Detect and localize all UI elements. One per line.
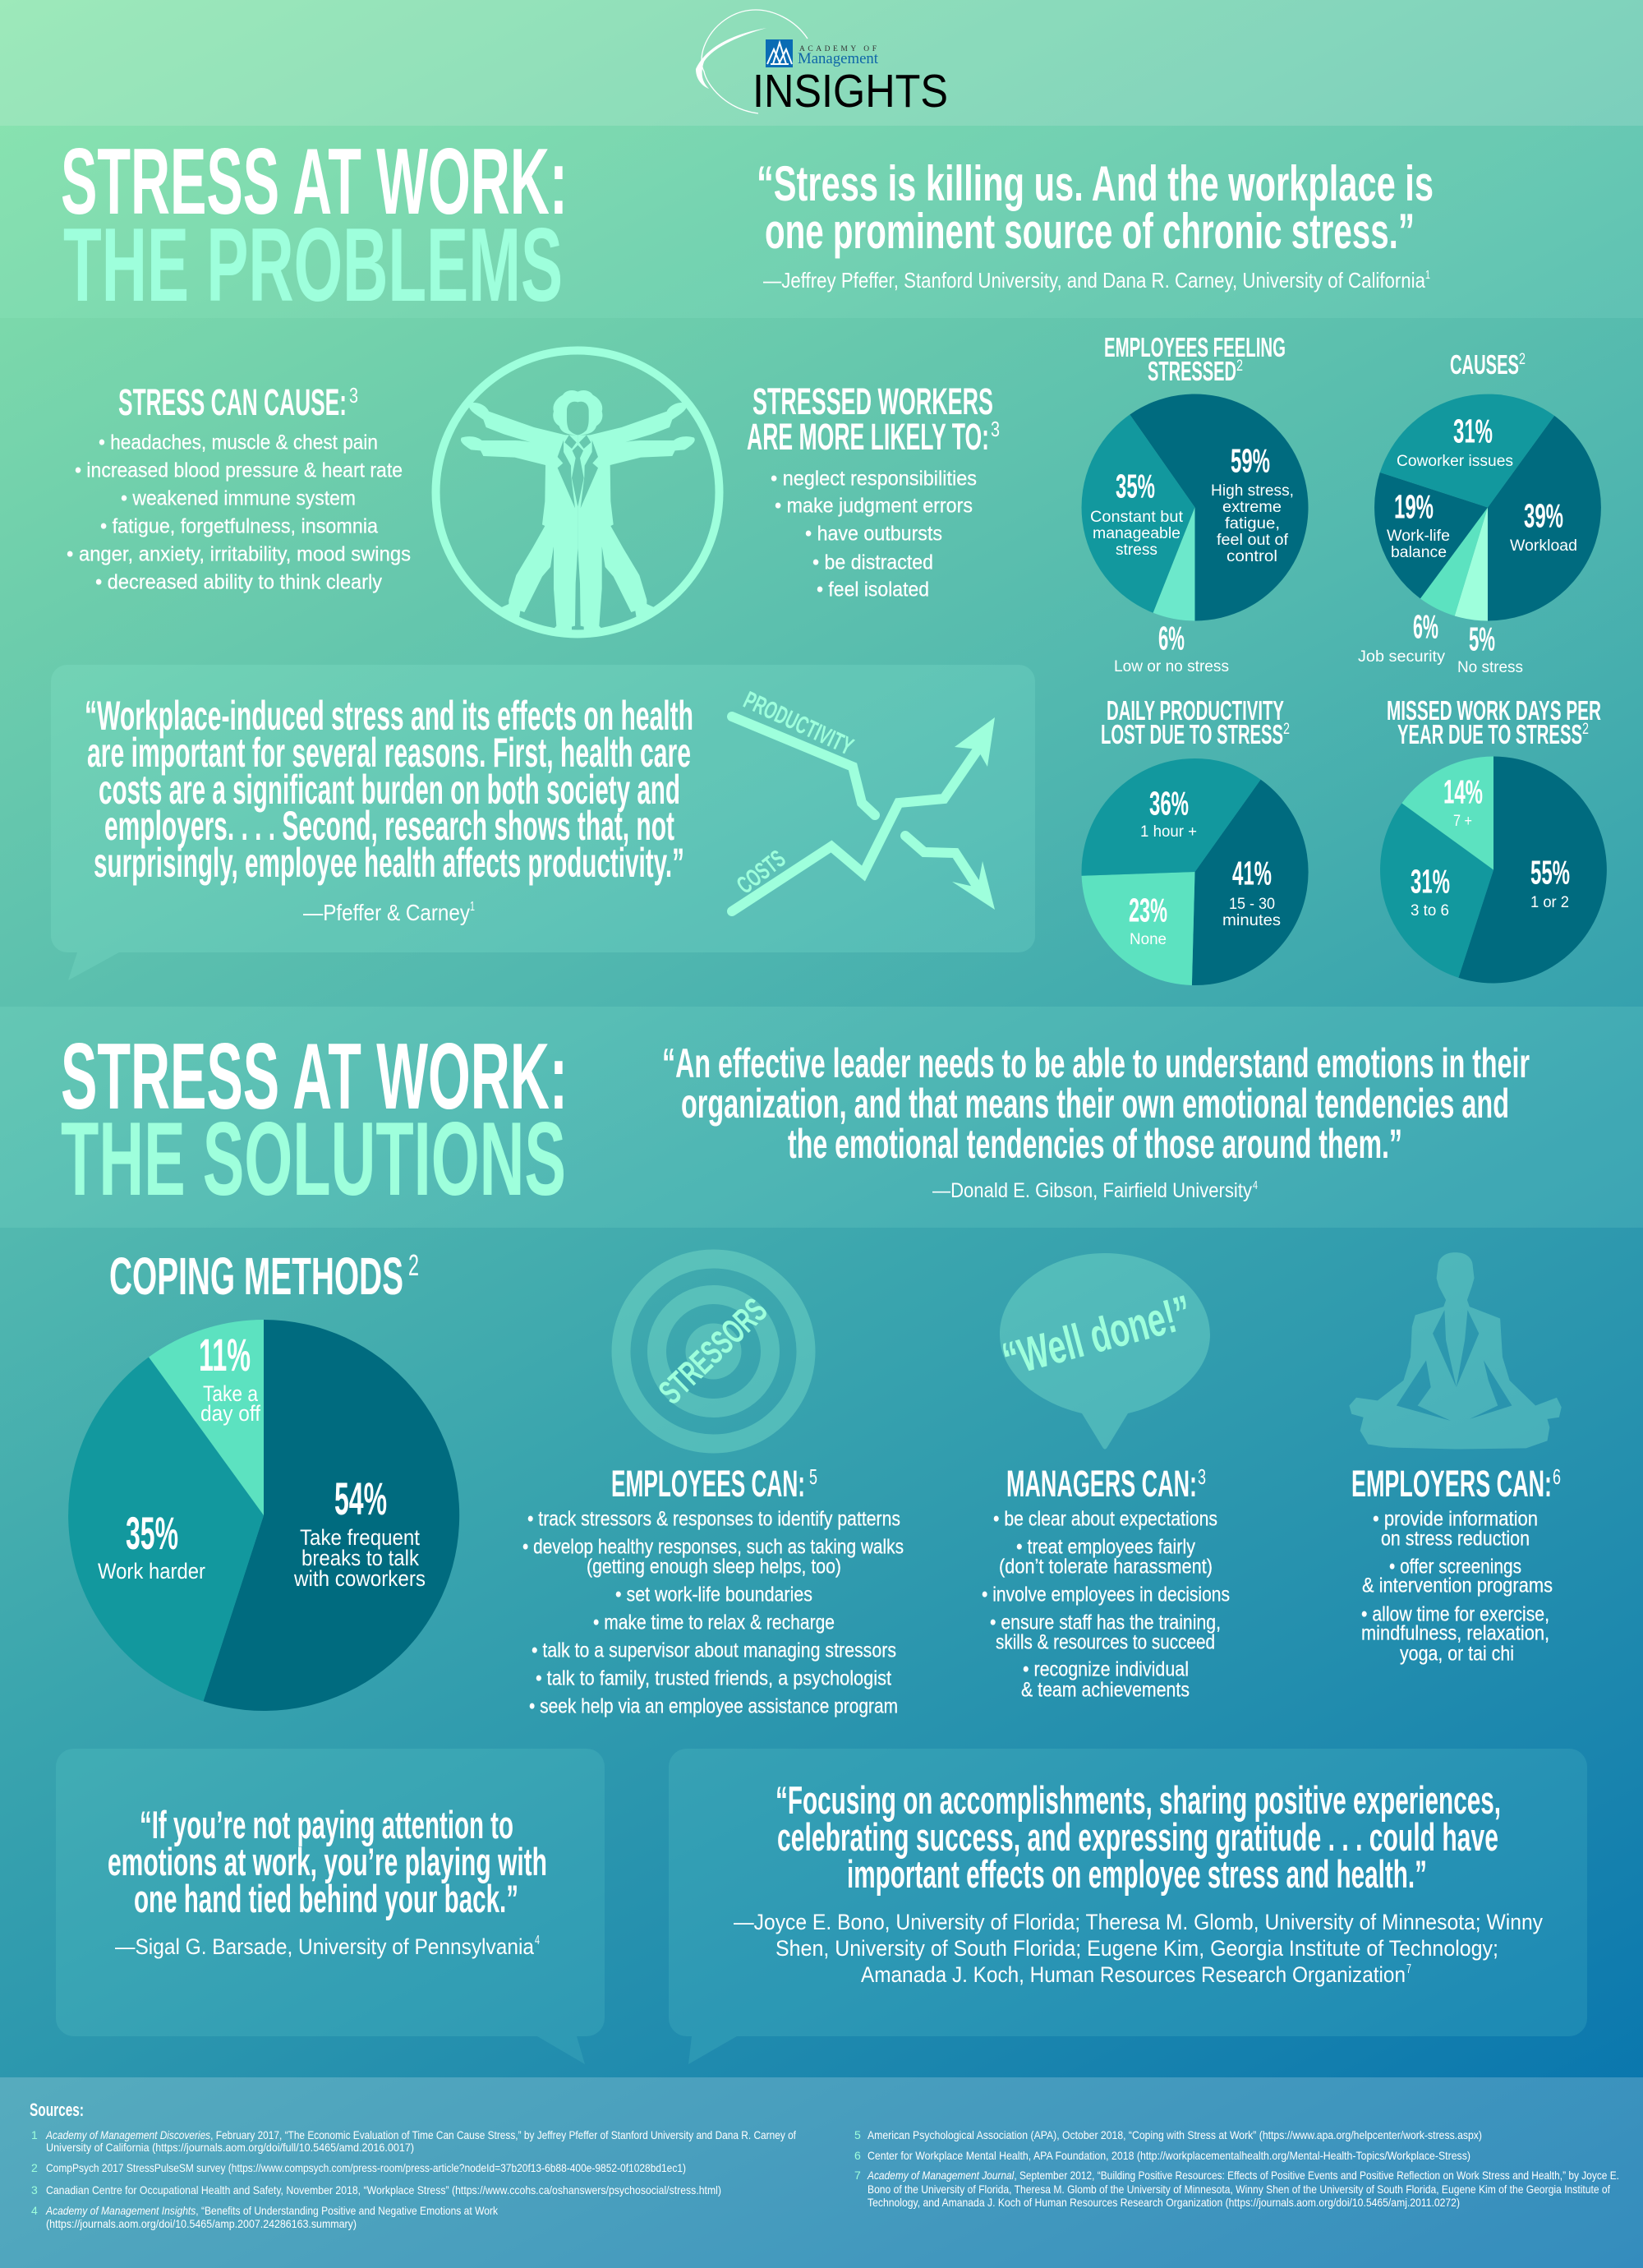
callout: Bono et al. quote: Amanada J. Koch, Human Resources Research Organization: [861, 1962, 1406, 1987]
panel: employees can: EMPLOYEES CAN:: [611, 1463, 805, 1505]
chart: missed work days: 1 or 2: [1530, 894, 1569, 911]
callout: Barsade quote: emotions at work, you’re playing with: [108, 1840, 547, 1883]
panel: stress can cause: 3: [349, 383, 358, 408]
panel: stressed workers: • neglect responsibilities: [771, 467, 977, 490]
panel: stress can cause: • weakened immune system: [121, 486, 356, 509]
sources list: CompPsych 2017 StressPulseSM survey (https://www.compsych.com/press-room/press-article?nodeId=37b20f13-6b88-400e-9852-0f1028bd1ec1): [46, 2161, 686, 2174]
panel: stressed workers: 3: [991, 417, 1000, 441]
panel: managers can: [982, 1463, 1230, 1701]
logo: [696, 10, 948, 118]
chart: causes: 31%: [1453, 413, 1493, 450]
chart: missed work days: 31%: [1411, 863, 1450, 901]
panel: employees can: 5: [809, 1464, 817, 1489]
callout: Barsade quote: one hand tied behind your back.”: [134, 1877, 518, 1920]
chart: causes: 19%: [1394, 488, 1434, 526]
sources list: 7: [854, 2169, 861, 2182]
quote: Pfeffer and Carney top: 1: [1425, 268, 1430, 282]
sources list: 4: [31, 2204, 38, 2217]
band: sources: [0, 2077, 1643, 2268]
chart: daily productivity lost: LOST DUE TO STRESS: [1101, 719, 1283, 749]
icon: well done speech bubble: [997, 1253, 1210, 1450]
chart: daily productivity lost: 41%: [1232, 855, 1272, 892]
callout: workplace induced stress: employers. . . . Second, research shows that, not: [104, 803, 674, 849]
callout: workplace induced stress: costs are a significant burden on both society and: [99, 767, 680, 813]
panel: managers can: MANAGERS CAN:: [1006, 1463, 1197, 1505]
panel: employees can: (getting enough sleep helps, too): [587, 1555, 841, 1578]
panel: employees can: • develop healthy responses, such as taking walks: [522, 1535, 904, 1558]
sources list: University of California (https://journals.aom.org/doi/full/10.5465/amd.2016.0017): [46, 2141, 414, 2154]
callout: Barsade quote: —Sigal G. Barsade, University of Pennsylvania: [115, 1934, 535, 1959]
panel: employees can: • track stressors & responses to identify patterns: [527, 1507, 900, 1530]
quote: Pfeffer and Carney top: —Jeffrey Pfeffer, Stanford University, and Dana R. Carney, University of California: [763, 268, 1425, 293]
panel: stressed workers: • make judgment errors: [775, 495, 973, 518]
chart: causes: No stress: [1457, 659, 1523, 676]
panel: stress can cause: [67, 381, 411, 593]
panel: employees can: • talk to family, trusted friends, a psychologist: [536, 1666, 891, 1689]
chart: employees feeling stressed: 59%: [1231, 442, 1270, 480]
panel: stress can cause: • anger, anxiety, irritability, mood swings: [67, 542, 411, 565]
callout: workplace induced stress: 1: [470, 900, 475, 914]
callout: Bono et al. quote: Shen, University of South Florida; Eugene Kim, Georgia Institute of Technology;: [775, 1936, 1498, 1961]
icon: stressors target: [621, 1259, 806, 1444]
panel: employees can: • make time to relax & recharge: [593, 1611, 835, 1634]
callout: workplace induced stress: —Pfeffer & Carney: [303, 900, 470, 925]
callout: Bono et al. quote: 7: [1406, 1962, 1411, 1976]
callout: Barsade quote: “If you’re not paying attention to: [140, 1803, 513, 1846]
sources list: Academy of Management Discoveries, February 2017, “The Economic Evaluation of Time Can Cause Stress,” by Jeffrey Pfeffer of Stanford University and Dana R. Carney of: [45, 2128, 796, 2141]
title: the problems: STRESS AT WORK:: [61, 130, 568, 234]
chart: daily productivity lost: None: [1130, 931, 1167, 948]
panel: stress can cause: • fatigue, forgetfulness, insomnia: [100, 514, 378, 537]
chart: daily productivity lost: 15 - 30: [1229, 896, 1275, 913]
chart: missed work days: 2: [1582, 721, 1589, 738]
chart: daily productivity lost: [1082, 695, 1309, 985]
panel: stressed workers: [747, 380, 1000, 602]
panel: employers can: mindfulness, relaxation,: [1361, 1622, 1549, 1645]
chart: daily productivity lost: DAILY PRODUCTIVITY: [1107, 695, 1284, 726]
panel: employers can: • offer screenings: [1389, 1555, 1521, 1578]
panel: employers can: • allow time for exercise,: [1361, 1602, 1549, 1625]
chart: causes: 2: [1519, 351, 1526, 368]
chart: employees feeling stressed: STRESSED: [1148, 356, 1236, 386]
chart: causes: 5%: [1469, 620, 1495, 657]
chart: employees feeling stressed: 35%: [1116, 467, 1155, 505]
chart: coping methods: COPING METHODS: [109, 1247, 403, 1306]
chart: causes: [1358, 349, 1601, 676]
panel: managers can: • involve employees in decisions: [982, 1583, 1230, 1606]
panel: managers can: & team achievements: [1021, 1678, 1190, 1701]
icon: productivity and costs arrows: [732, 686, 995, 911]
chart: missed work days: [1380, 695, 1607, 983]
sources list: 5: [854, 2128, 861, 2141]
chart: coping methods: Take frequent: [300, 1525, 420, 1550]
panel: managers can: • be clear about expectations: [993, 1507, 1217, 1530]
chart: employees feeling stressed: control: [1226, 548, 1277, 565]
chart: coping methods: day off: [200, 1401, 260, 1426]
icon: vitruvian stressed worker: [435, 350, 720, 634]
panel: stressed workers: STRESSED WORKERS: [752, 380, 993, 422]
chart: employees feeling stressed: stress: [1116, 542, 1157, 559]
sources list: 2: [31, 2161, 38, 2174]
callout: workplace induced stress: are important for several reasons. First, health care: [87, 730, 691, 776]
title: the solutions: THE SOLUTIONS: [61, 1100, 566, 1217]
callout: workplace induced stress: surprisingly, employee health affects productivity.”: [94, 840, 684, 886]
icon: well done speech bubble: “Well done!”: [997, 1285, 1197, 1387]
chart: coping methods: breaks to talk: [301, 1546, 419, 1570]
chart: employees feeling stressed: fatigue,: [1225, 515, 1280, 532]
chart: missed work days: 3 to 6: [1411, 902, 1449, 920]
sources list: Technology, and Amanada J. Koch of Human Resources Research Organization (https://journals.aom.org/doi/10.5465/amj.2011.0272): [868, 2196, 1460, 2209]
sources list: 1: [31, 2128, 38, 2141]
chart: coping methods: Work harder: [98, 1559, 205, 1583]
title: the solutions: STRESS AT WORK:: [61, 1025, 568, 1129]
panel: employees can: • seek help via an employee assistance program: [529, 1694, 898, 1717]
panel: stress can cause: • headaches, muscle & chest pain: [99, 431, 378, 454]
callout: workplace induced stress: [51, 665, 1035, 980]
icon: productivity and costs arrows: COSTS: [732, 845, 791, 900]
title: the problems: THE PROBLEMS: [63, 206, 563, 323]
panel: managers can: skills & resources to succeed: [996, 1630, 1215, 1653]
sources list: Center for Workplace Mental Health, APA Foundation, 2018 (http://workplacementalhealth.org/Mental-Health-Topics/Workplace-Stress): [868, 2149, 1470, 2162]
chart: employees feeling stressed: EMPLOYEES FEELING: [1104, 332, 1286, 362]
title: the solutions: [61, 1025, 568, 1217]
chart: employees feeling stressed: [1082, 332, 1309, 675]
chart: daily productivity lost: minutes: [1222, 912, 1281, 929]
chart: daily productivity lost: 23%: [1129, 891, 1167, 929]
panel: managers can: • recognize individual: [1023, 1658, 1189, 1681]
chart: employees feeling stressed: High stress,: [1211, 482, 1294, 500]
panel: employers can: & intervention programs: [1362, 1574, 1553, 1597]
panel: employees can: [522, 1463, 904, 1717]
sources list: American Psychological Association (APA), October 2018, “Coping with Stress at Work” (https://www.apa.org/helpcenter/work-stress.aspx): [868, 2128, 1482, 2141]
sources list: Canadian Centre for Occupational Health and Safety, November 2018, “Workplace Stress” (https://www.ccohs.ca/oshanswers/psychosocial/stress.html): [46, 2183, 721, 2197]
logo: INSIGHTS: [752, 65, 948, 118]
title: the problems: [61, 130, 568, 323]
chart: employees feeling stressed: 2: [1236, 357, 1243, 375]
panel: managers can: • treat employees fairly: [1016, 1535, 1195, 1558]
panel: stressed workers: ARE MORE LIKELY TO:: [747, 416, 989, 458]
icon: stressors target: STRESSORS: [651, 1290, 775, 1411]
callout: Bono et al. quote: [669, 1749, 1587, 2064]
chart: employees feeling stressed: 6%: [1158, 620, 1185, 657]
chart: causes: Coworker issues: [1397, 453, 1513, 470]
chart: causes: 6%: [1413, 608, 1438, 646]
logo: Management: [798, 50, 879, 67]
sources list: [30, 2100, 1619, 2230]
chart: causes: CAUSES: [1450, 349, 1519, 380]
chart: missed work days: 7 +: [1453, 813, 1472, 830]
callout: Barsade quote: 4: [535, 1934, 540, 1948]
chart: coping methods: 54%: [334, 1473, 387, 1524]
chart: employees feeling stressed: Constant but: [1090, 509, 1184, 526]
chart: missed work days: 14%: [1443, 772, 1483, 810]
icon: productivity and costs arrows: PRODUCTIVITY: [739, 686, 858, 761]
panel: stressed workers: • have outbursts: [805, 523, 942, 546]
quote: Gibson: —Donald E. Gibson, Fairfield University: [932, 1179, 1252, 1202]
chart: employees feeling stressed: extreme: [1222, 499, 1282, 516]
sources list: 3: [31, 2183, 38, 2197]
chart: daily productivity lost: 1 hour +: [1140, 823, 1197, 841]
chart: coping methods: 35%: [126, 1507, 178, 1559]
panel: employers can: 6: [1553, 1464, 1561, 1489]
logo: ACADEMY OF: [799, 45, 877, 53]
panel: employees can: • set work-life boundaries: [615, 1583, 812, 1606]
panel: managers can: • ensure staff has the training,: [990, 1611, 1221, 1634]
chart: coping methods: with coworkers: [293, 1566, 426, 1591]
chart: missed work days: 55%: [1530, 853, 1570, 891]
chart: causes: Workload: [1510, 537, 1577, 555]
chart: causes: balance: [1391, 544, 1447, 561]
chart: causes: 39%: [1524, 496, 1563, 534]
chart: coping methods: [68, 1247, 459, 1711]
chart: causes: Work-life: [1387, 528, 1450, 545]
sources list: (https://journals.aom.org/doi/10.5465/amp.2007.24286163.summary): [46, 2217, 357, 2230]
chart: employees feeling stressed: manageable: [1093, 525, 1180, 542]
chart: employees feeling stressed: feel out of: [1217, 532, 1289, 549]
quote: Gibson: [662, 1040, 1530, 1202]
chart: causes: Job security: [1358, 648, 1446, 666]
sources list: Academy of Management Insights, “Benefits of Understanding Positive and Negative Emotions at Work: [45, 2204, 499, 2217]
panel: managers can: 3: [1198, 1464, 1206, 1489]
panel: employers can: [1351, 1463, 1561, 1665]
panel: employers can: yoga, or tai chi: [1400, 1642, 1514, 1665]
quote: Gibson: 4: [1253, 1178, 1258, 1192]
panel: stressed workers: • be distracted: [812, 551, 933, 574]
band: solutions title: [0, 1007, 1643, 1228]
sources list: 6: [854, 2149, 861, 2162]
chart: daily productivity lost: 36%: [1149, 784, 1189, 822]
panel: managers can: (don’t tolerate harassment): [999, 1555, 1213, 1578]
callout: workplace induced stress: “Workplace-induced stress and its effects on health: [85, 693, 693, 739]
sources list: Sources:: [30, 2100, 84, 2120]
chart: employees feeling stressed: Low or no stress: [1114, 658, 1229, 675]
callout: Bono et al. quote: —Joyce E. Bono, University of Florida; Theresa M. Glomb, University of Minnesota; Winny: [734, 1910, 1543, 1934]
chart: coping methods: 2: [408, 1248, 419, 1282]
panel: stress can cause: • increased blood pressure & heart rate: [75, 459, 403, 482]
panel: employers can: on stress reduction: [1381, 1527, 1530, 1550]
chart: coping methods: 11%: [199, 1329, 251, 1381]
panel: employees can: • talk to a supervisor about managing stressors: [532, 1639, 896, 1662]
panel: stressed workers: • feel isolated: [817, 579, 929, 602]
chart: coping methods: Take a: [203, 1381, 259, 1406]
band: problems title: [0, 126, 1643, 318]
panel: stress can cause: STRESS CAN CAUSE:: [118, 381, 347, 423]
header band: [0, 0, 1643, 126]
callout: Barsade quote: [56, 1749, 605, 2064]
panel: employers can: • provide information: [1373, 1507, 1538, 1530]
icon: meditating employer: [1349, 1252, 1562, 1450]
chart: daily productivity lost: 2: [1283, 721, 1290, 738]
panel: stress can cause: • decreased ability to think clearly: [95, 570, 382, 593]
quote: Pfeffer and Carney top: [757, 156, 1434, 293]
